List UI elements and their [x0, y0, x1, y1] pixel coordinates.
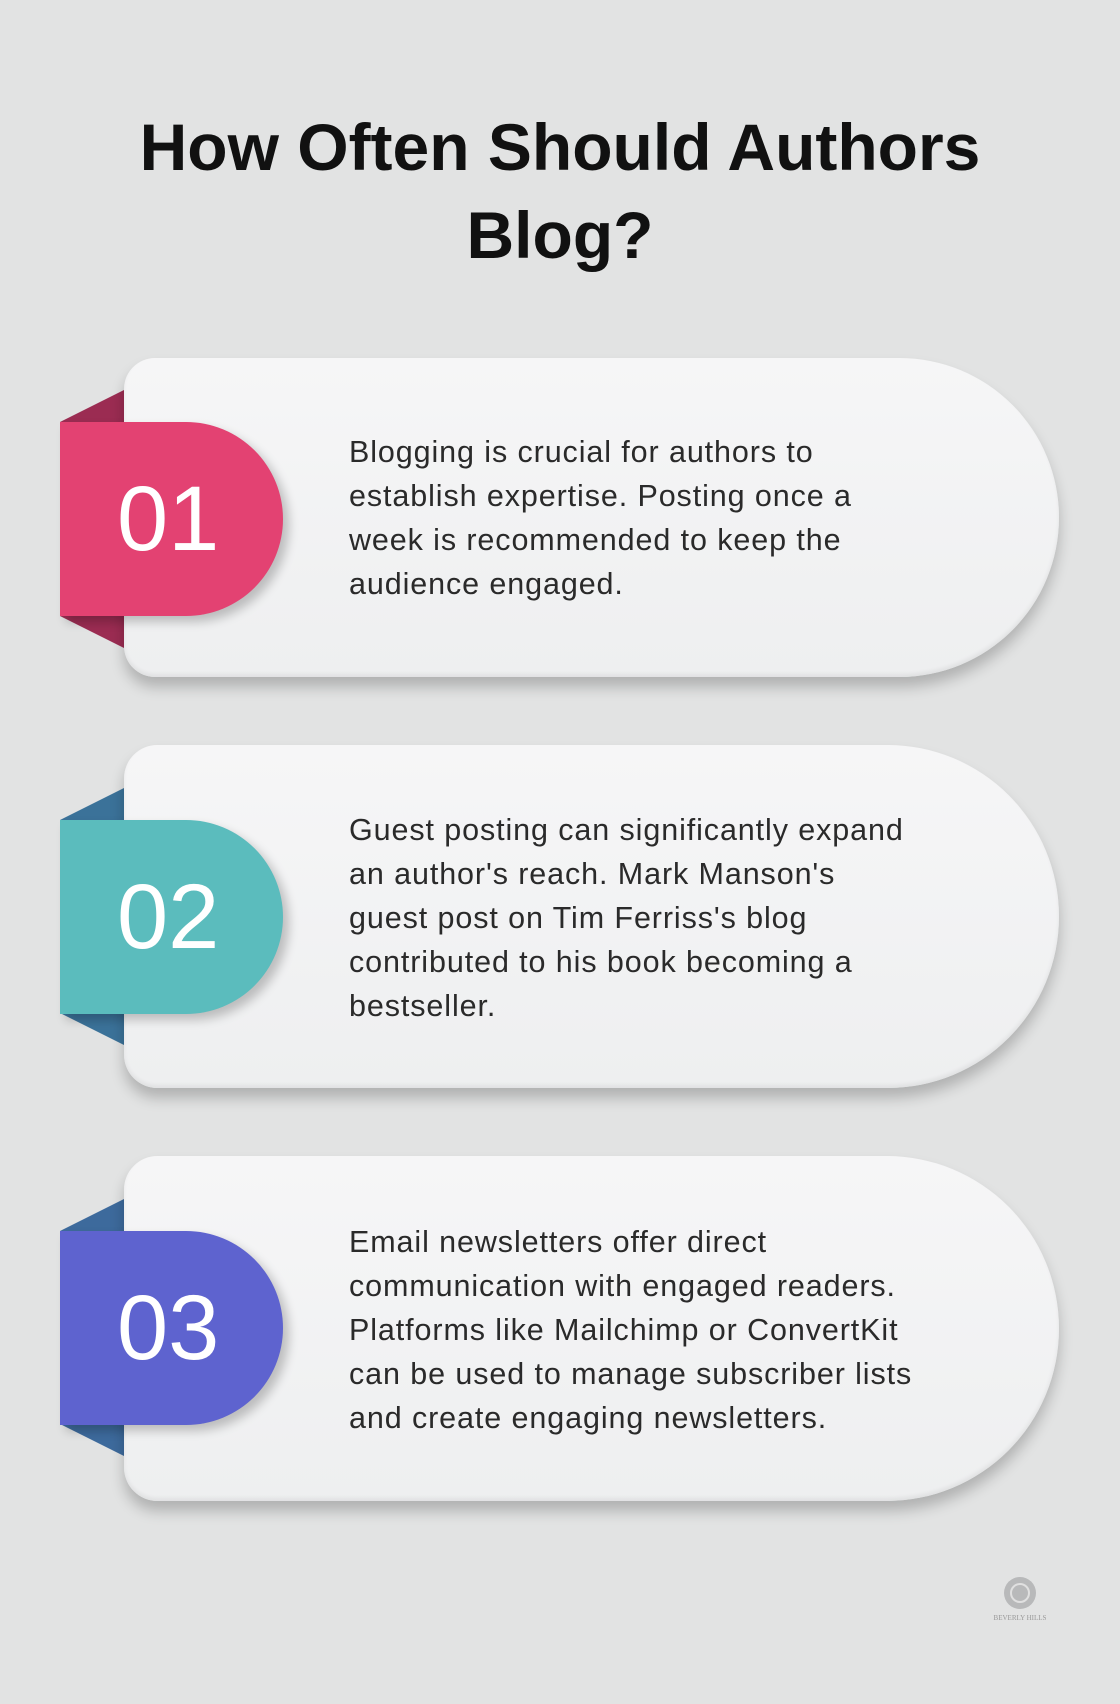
number tab 03: 03 [117, 1277, 219, 1379]
number tab 01: 01 [117, 468, 219, 570]
card 02 [124, 745, 1059, 1088]
title: Blog? [467, 198, 653, 272]
fold shading 02 [60, 788, 124, 1045]
text 02: an author's reach. Mark Manson's [349, 857, 835, 891]
fold shading 03 [60, 1199, 124, 1456]
text 02: guest post on Tim Ferriss's blog [349, 901, 807, 935]
number tab 03 [60, 1231, 283, 1425]
logo [994, 1577, 1046, 1622]
text 01 [349, 435, 852, 601]
panel: item 02 [60, 745, 1065, 1104]
number tab 02 [60, 820, 283, 1014]
text 01: audience engaged. [349, 567, 624, 601]
title: How Often Should Authors [140, 110, 980, 184]
text 03: communication with engaged readers. [349, 1269, 896, 1303]
title [140, 110, 980, 272]
text 03: Email newsletters offer direct [349, 1225, 767, 1259]
text 01: Blogging is crucial for authors to [349, 435, 814, 469]
logo emblem [1004, 1577, 1036, 1609]
text 03 [349, 1225, 912, 1435]
text 02: bestseller. [349, 989, 496, 1023]
fold shading 01 [60, 390, 124, 648]
number tab 01 [60, 422, 283, 616]
logo: BEVERLY HILLS [994, 1614, 1046, 1622]
panel: item 01 [60, 358, 1065, 694]
text 02 [349, 813, 904, 1023]
text 03: and create engaging newsletters. [349, 1401, 827, 1435]
text 02: contributed to his book becoming a [349, 945, 853, 979]
card 03 [124, 1156, 1059, 1501]
text 02: Guest posting can significantly expand [349, 813, 904, 847]
text 03: can be used to manage subscriber lists [349, 1357, 912, 1391]
card 01 [124, 358, 1059, 677]
text 01: establish expertise. Posting once a [349, 479, 852, 513]
text 01: week is recommended to keep the [349, 523, 841, 557]
number tab 02: 02 [117, 866, 219, 968]
text 03: Platforms like Mailchimp or ConvertKit [349, 1313, 898, 1347]
